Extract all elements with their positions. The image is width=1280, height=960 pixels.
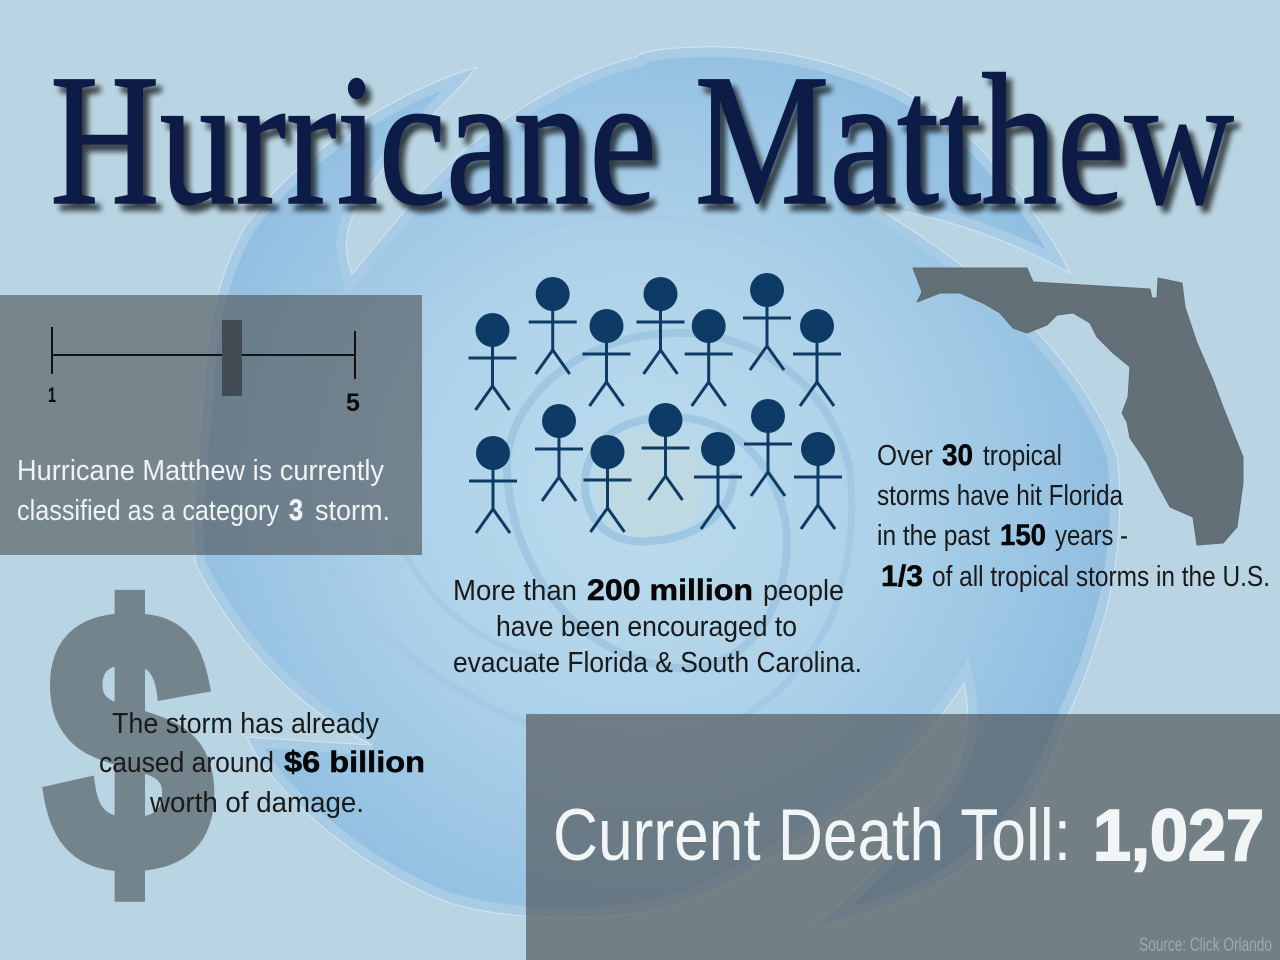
- Florida storms text: 1/3: [881, 560, 923, 593]
- category text: Hurricane Matthew is currently: [17, 455, 384, 487]
- Florida storms text: Over: [877, 440, 933, 472]
- Florida storms text: in the past: [877, 520, 990, 552]
- panel: death toll: [526, 714, 1280, 960]
- category text: storm.: [315, 495, 390, 527]
- Florida storms text: [877, 439, 1270, 593]
- people icons: [468, 273, 842, 533]
- category scale: [48, 320, 360, 417]
- category text: classified as a category: [17, 495, 279, 527]
- hurricane graphic: [194, 47, 1120, 928]
- Florida storms text: tropical: [983, 440, 1062, 472]
- damage text: [99, 708, 425, 819]
- damage text: The storm has already: [112, 708, 379, 740]
- Florida storms text: 150: [1000, 519, 1046, 552]
- panel: storm category: [0, 295, 422, 555]
- evacuation text: have been encouraged to: [496, 611, 797, 643]
- evacuation text: 200 million: [587, 574, 753, 607]
- evacuation text: [453, 574, 862, 679]
- Florida storms text: 30: [942, 439, 973, 472]
- icon: dollar sign: $: [47, 540, 211, 943]
- death toll text: Current Death Toll:: [553, 795, 1071, 876]
- damage text: worth of damage.: [149, 787, 364, 819]
- death toll text: 1,027: [1093, 796, 1264, 876]
- evacuation text: evacuate Florida & South Carolina.: [453, 647, 862, 679]
- category text: [17, 455, 390, 527]
- category text: 3: [289, 494, 303, 527]
- Florida storms text: storms have hit Florida: [877, 480, 1124, 512]
- Florida storms text: years -: [1055, 520, 1128, 552]
- damage text: caused around: [99, 747, 274, 779]
- category scale: 5: [346, 389, 360, 417]
- evacuation text: More than: [453, 575, 577, 607]
- category scale: 1: [48, 384, 56, 407]
- evacuation text: people: [763, 575, 844, 607]
- icon: Florida map: [913, 268, 1243, 545]
- damage text: $6 billion: [284, 746, 425, 779]
